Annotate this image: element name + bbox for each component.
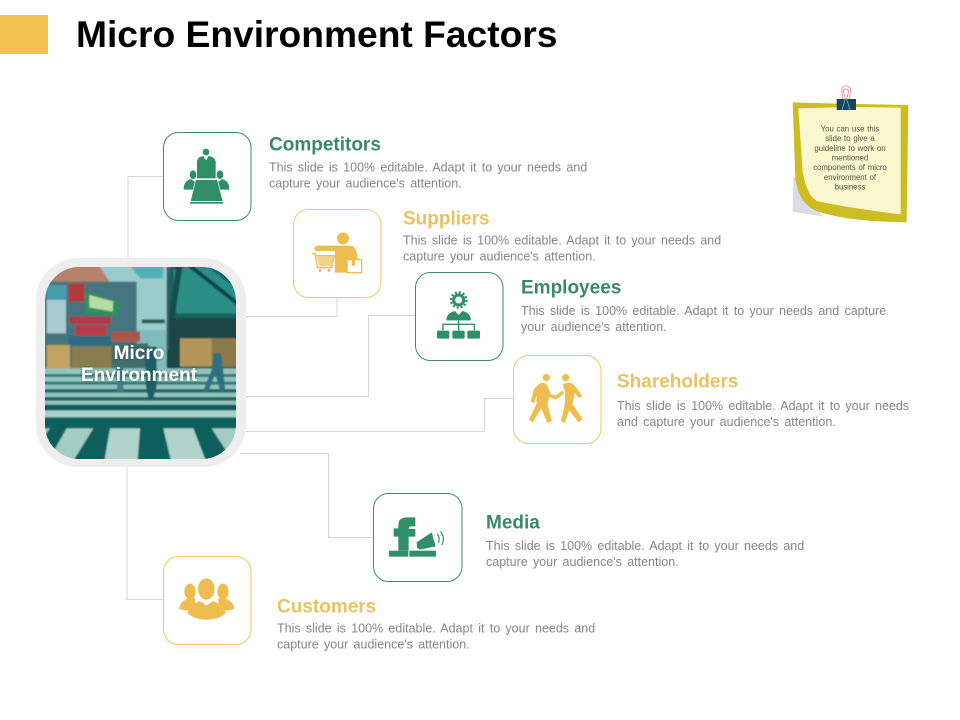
media text xyxy=(486,512,804,569)
suppliers text: Suppliers xyxy=(403,208,490,230)
shareholders text: and capture your audience's attention. xyxy=(617,415,836,429)
competitors text: capture your audience's attention. xyxy=(269,176,462,190)
title: Micro Environment Factors xyxy=(76,13,557,55)
suppliers text xyxy=(403,208,721,264)
media text: capture your audience's attention. xyxy=(486,555,679,569)
customers text: capture your audience's attention. xyxy=(277,638,470,652)
customers text xyxy=(277,596,595,652)
central photo panel xyxy=(36,258,246,467)
note text: components of micro xyxy=(813,163,887,172)
panel: customers icon xyxy=(164,556,251,644)
note text: guideline to work on xyxy=(814,144,886,153)
employees text xyxy=(521,278,886,334)
shareholders text: Shareholders xyxy=(617,372,738,392)
connector lines xyxy=(127,176,513,600)
note text: slide to give a xyxy=(825,134,875,143)
panel: shareholders icon xyxy=(514,356,601,444)
competitors text: Competitors xyxy=(269,134,381,156)
shareholders text: This slide is 100% editable. Adapt it to your needs xyxy=(617,399,909,413)
sticky note xyxy=(793,86,908,222)
panel: media icon xyxy=(374,494,462,582)
icon: binder clip xyxy=(837,86,856,110)
photo label: Micro xyxy=(114,343,164,364)
customers text: This slide is 100% editable. Adapt it to your needs and xyxy=(277,622,595,636)
customers text: Customers xyxy=(277,596,376,618)
employees text: This slide is 100% editable. Adapt it to your needs and capture xyxy=(521,304,886,318)
shareholders text xyxy=(617,372,909,429)
note text: You can use this xyxy=(821,124,879,134)
employees text: your audience's attention. xyxy=(521,320,667,334)
suppliers text: capture your audience's attention. xyxy=(403,250,596,264)
note text: mentioned xyxy=(832,154,868,162)
panel: suppliers icon xyxy=(294,210,381,298)
photo label second line: Environment xyxy=(81,365,198,386)
note text: environment of xyxy=(824,173,877,182)
media text: This slide is 100% editable. Adapt it to your needs and xyxy=(486,539,804,553)
title accent block xyxy=(0,15,48,54)
competitors text: This slide is 100% editable. Adapt it to your needs and xyxy=(269,160,587,174)
employees text: Employees xyxy=(521,278,621,298)
panel: competitors icon xyxy=(164,132,251,220)
suppliers text: This slide is 100% editable. Adapt it to your needs and xyxy=(403,234,721,248)
panel: employees icon xyxy=(416,272,503,360)
note text xyxy=(813,124,887,192)
competitors text xyxy=(269,134,587,190)
media text: Media xyxy=(486,512,540,534)
note text: business xyxy=(835,182,865,192)
